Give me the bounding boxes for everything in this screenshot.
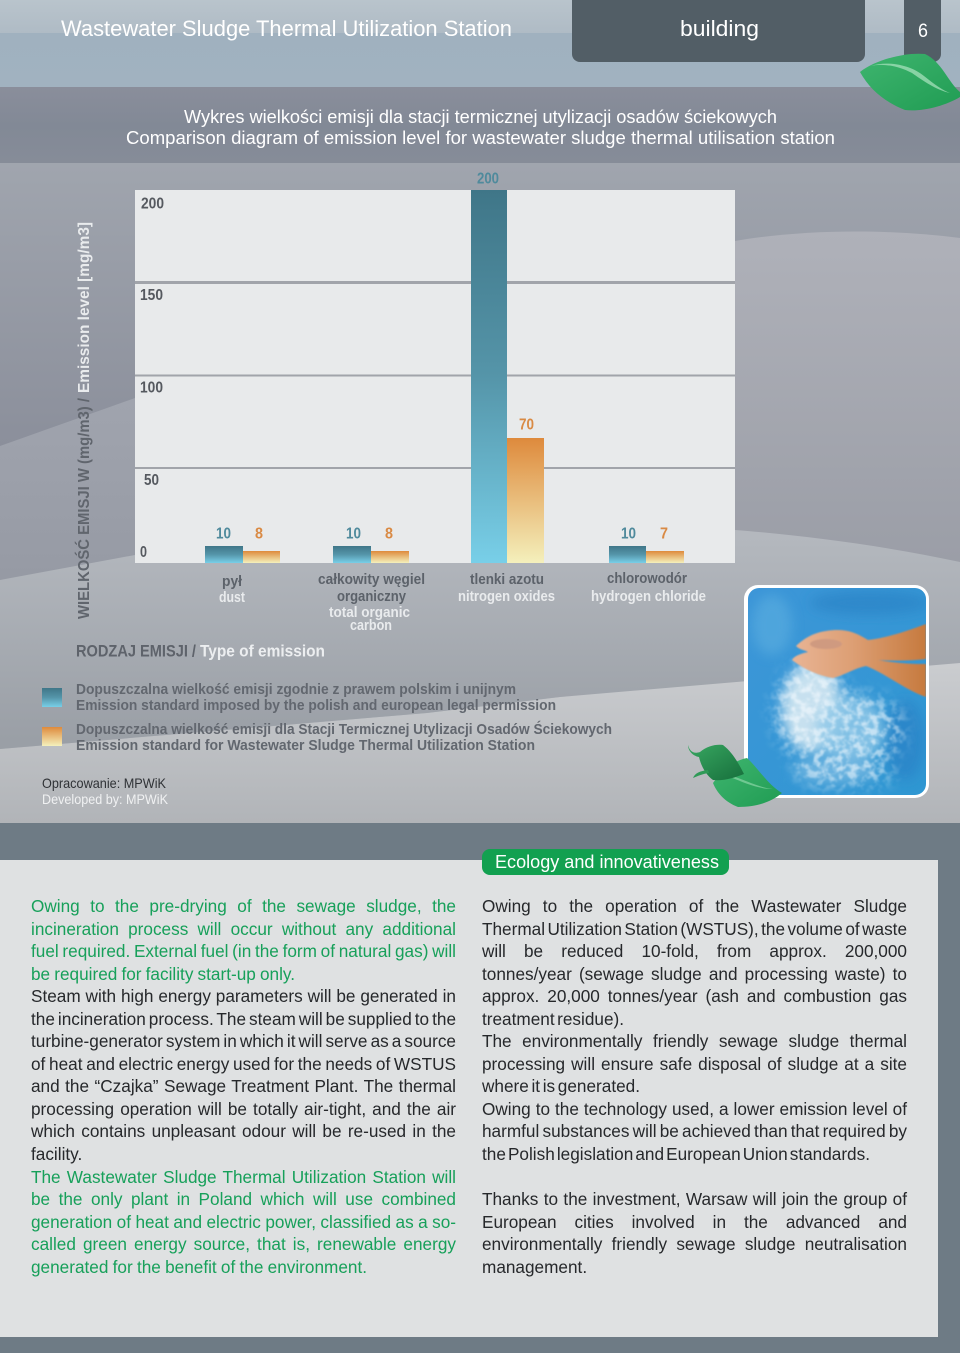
category labels: pył bbox=[222, 573, 243, 590]
group: hydrogen chloride: 7 bbox=[660, 526, 668, 542]
chart title band: Comparison diagram of emission level for wastewater sludge thermal utilisation station bbox=[126, 128, 835, 148]
group: nitrogen oxides bbox=[471, 170, 544, 563]
right text column: harmful substances will be achieved than that required by bbox=[482, 1121, 907, 1141]
heading pill: Ecology and innovativeness: Ecology and innovativeness bbox=[495, 852, 719, 872]
section tab: building: building bbox=[680, 16, 759, 41]
left text column bbox=[31, 896, 456, 1277]
credits: Opracowanie: MPWiK bbox=[42, 775, 167, 791]
group: hydrogen chloride bbox=[609, 526, 684, 563]
legend swatch: orange bbox=[42, 727, 62, 746]
group: total organic carbon: 10 bbox=[346, 526, 361, 542]
left text column: turbine-generator system in which it will serve as a source bbox=[31, 1031, 456, 1051]
group: hydrogen chloride: 10 bbox=[621, 526, 636, 542]
right text column: The environmentally friendly sewage sludge thermal bbox=[482, 1031, 907, 1051]
right text column: European cities involved in the advanced and bbox=[482, 1212, 907, 1232]
left text column: processing operation will be totally air-tight, and the air bbox=[31, 1099, 456, 1119]
y axis labels bbox=[140, 196, 164, 561]
icon: top leaf bbox=[860, 54, 960, 110]
legend text: station standard: Dopuszczalna wielkość emisji dla Stacji Termicznej Utylizacji Osadów Ściekowych bbox=[76, 720, 612, 738]
left text column: Steam with high energy parameters will be generated in bbox=[31, 986, 456, 1006]
y axis title: Emission level [mg/m3] bbox=[76, 222, 93, 393]
category labels: chlorowodór bbox=[607, 570, 687, 587]
section tab: building bbox=[572, 0, 865, 62]
page number tab bbox=[904, 0, 941, 62]
category labels: całkowity węgiel bbox=[318, 571, 425, 588]
bar chart bbox=[74, 170, 735, 660]
right text column: Thanks to the investment, Warsaw will join the group of bbox=[482, 1189, 907, 1209]
left text column: called green energy source, that is, renewable energy bbox=[31, 1234, 456, 1254]
left text column: Owing to the pre-drying of the sewage sludge, the bbox=[31, 896, 456, 916]
left text column: facility. bbox=[31, 1144, 82, 1164]
left text column: incineration process will occur without any additional bbox=[31, 919, 456, 939]
legend bbox=[42, 681, 612, 754]
category labels: carbon bbox=[350, 617, 392, 634]
y axis labels: 200 bbox=[141, 196, 164, 212]
y axis title: WIELKOŚĆ EMISJI W (mg/m3) / bbox=[74, 397, 93, 619]
right text column: the Polish legislation and European Union standards. bbox=[482, 1144, 870, 1164]
legend text: legal standard bbox=[76, 681, 556, 714]
group: total organic carbon: 8 bbox=[385, 526, 393, 542]
left text column: The Wastewater Sludge Thermal Utilization Station will bbox=[31, 1167, 456, 1187]
header background bbox=[0, 0, 960, 87]
category labels: nitrogen oxides bbox=[458, 588, 555, 605]
category labels: tlenki azotu bbox=[470, 571, 544, 588]
left text column: the incineration process. The steam will be supplied to the bbox=[31, 1009, 456, 1029]
page number tab: 6 bbox=[918, 21, 928, 42]
plot area bbox=[135, 190, 735, 563]
legend swatch: blue bbox=[42, 688, 62, 707]
x axis title: Type of emission bbox=[200, 642, 325, 660]
right text column: approx. 20,000 tonnes/year (ash and combustion gas bbox=[482, 986, 907, 1006]
category labels: total organic bbox=[329, 604, 410, 621]
y axis labels: 50 bbox=[144, 472, 159, 489]
left text column: which contains unpleasant odour will be re-used in the bbox=[31, 1121, 456, 1141]
legend text: legal standard: Dopuszczalna wielkość emisji zgodnie z prawem polskim i unijnym bbox=[76, 681, 516, 698]
group: nitrogen oxides: 70 bbox=[519, 416, 534, 434]
right text column: management. bbox=[482, 1257, 587, 1277]
right text column bbox=[482, 896, 908, 1277]
heading pill: Ecology and innovativeness bbox=[482, 849, 729, 875]
chart section background bbox=[0, 163, 960, 823]
left text column: of heat and electric energy used for the needs of WSTUS bbox=[31, 1054, 456, 1074]
y axis labels: 150 bbox=[140, 287, 163, 304]
category labels: hydrogen chloride bbox=[591, 588, 706, 605]
right text column: Owing to the technology used, a lower emission level of bbox=[482, 1099, 907, 1119]
left text column: be the only plant in Poland which will use combined bbox=[31, 1189, 456, 1209]
category labels bbox=[219, 570, 706, 634]
left text column: generated for the benefit of the environment. bbox=[31, 1257, 367, 1277]
right text column: environmentally friendly sewage sludge neutralisation bbox=[482, 1234, 907, 1254]
legend text: legal standard: Emission standard imposed by the polish and european legal permission bbox=[76, 697, 556, 714]
y axis labels: 0 bbox=[140, 544, 147, 561]
group: nitrogen oxides: 200 bbox=[477, 170, 499, 188]
right text column: tonnes/year (sewage sludge and processing waste) to bbox=[482, 964, 907, 984]
category labels: dust bbox=[219, 589, 245, 606]
y axis labels: 100 bbox=[140, 380, 163, 396]
left text column: be required for facility start-up only. bbox=[31, 964, 295, 984]
group: total organic carbon bbox=[333, 526, 409, 563]
left text column: generation of heat and electric power, classified as a so- bbox=[31, 1212, 456, 1232]
title: Wastewater Sludge Thermal Utilization Station bbox=[61, 16, 512, 41]
right text column: Owing to the operation of the Wastewater Sludge bbox=[482, 896, 907, 916]
group: dust: 10 bbox=[216, 526, 231, 542]
group: dust: 8 bbox=[255, 526, 263, 542]
group: dust bbox=[205, 526, 280, 563]
left text column: and the “Czajka” Sewage Treatment Plant. The thermal bbox=[31, 1076, 456, 1096]
legend text: station standard bbox=[76, 720, 612, 754]
right text column: will be reduced 10-fold, from approx. 200,000 bbox=[482, 941, 907, 961]
chart title band: Wykres wielkości emisji dla stacji termicznej utylizacji osadów ściekowych bbox=[184, 107, 777, 127]
legend text: station standard: Emission standard for Wastewater Sludge Thermal Utilization Station bbox=[76, 737, 535, 754]
chart title band bbox=[0, 87, 960, 163]
right text column: Thermal Utilization Station (WSTUS), the volume of waste bbox=[482, 919, 907, 939]
left text column: fuel required. External fuel (in the form of natural gas) will bbox=[31, 941, 456, 961]
credits bbox=[42, 775, 169, 807]
right text column: processing will ensure safe disposal of sludge at a site bbox=[482, 1054, 907, 1074]
x axis title bbox=[76, 642, 325, 660]
photo: hands in water bbox=[744, 585, 930, 798]
right text column: treatment residue). bbox=[482, 1009, 624, 1029]
icon: double leaf bbox=[688, 745, 782, 807]
x axis title: RODZAJ EMISJI / bbox=[76, 642, 196, 660]
y axis title bbox=[74, 222, 93, 619]
category labels: organiczny bbox=[337, 588, 407, 605]
credits: Developed by: MPWiK bbox=[42, 791, 169, 807]
right text column: where it is generated. bbox=[482, 1076, 640, 1096]
lower section background bbox=[0, 823, 960, 1353]
